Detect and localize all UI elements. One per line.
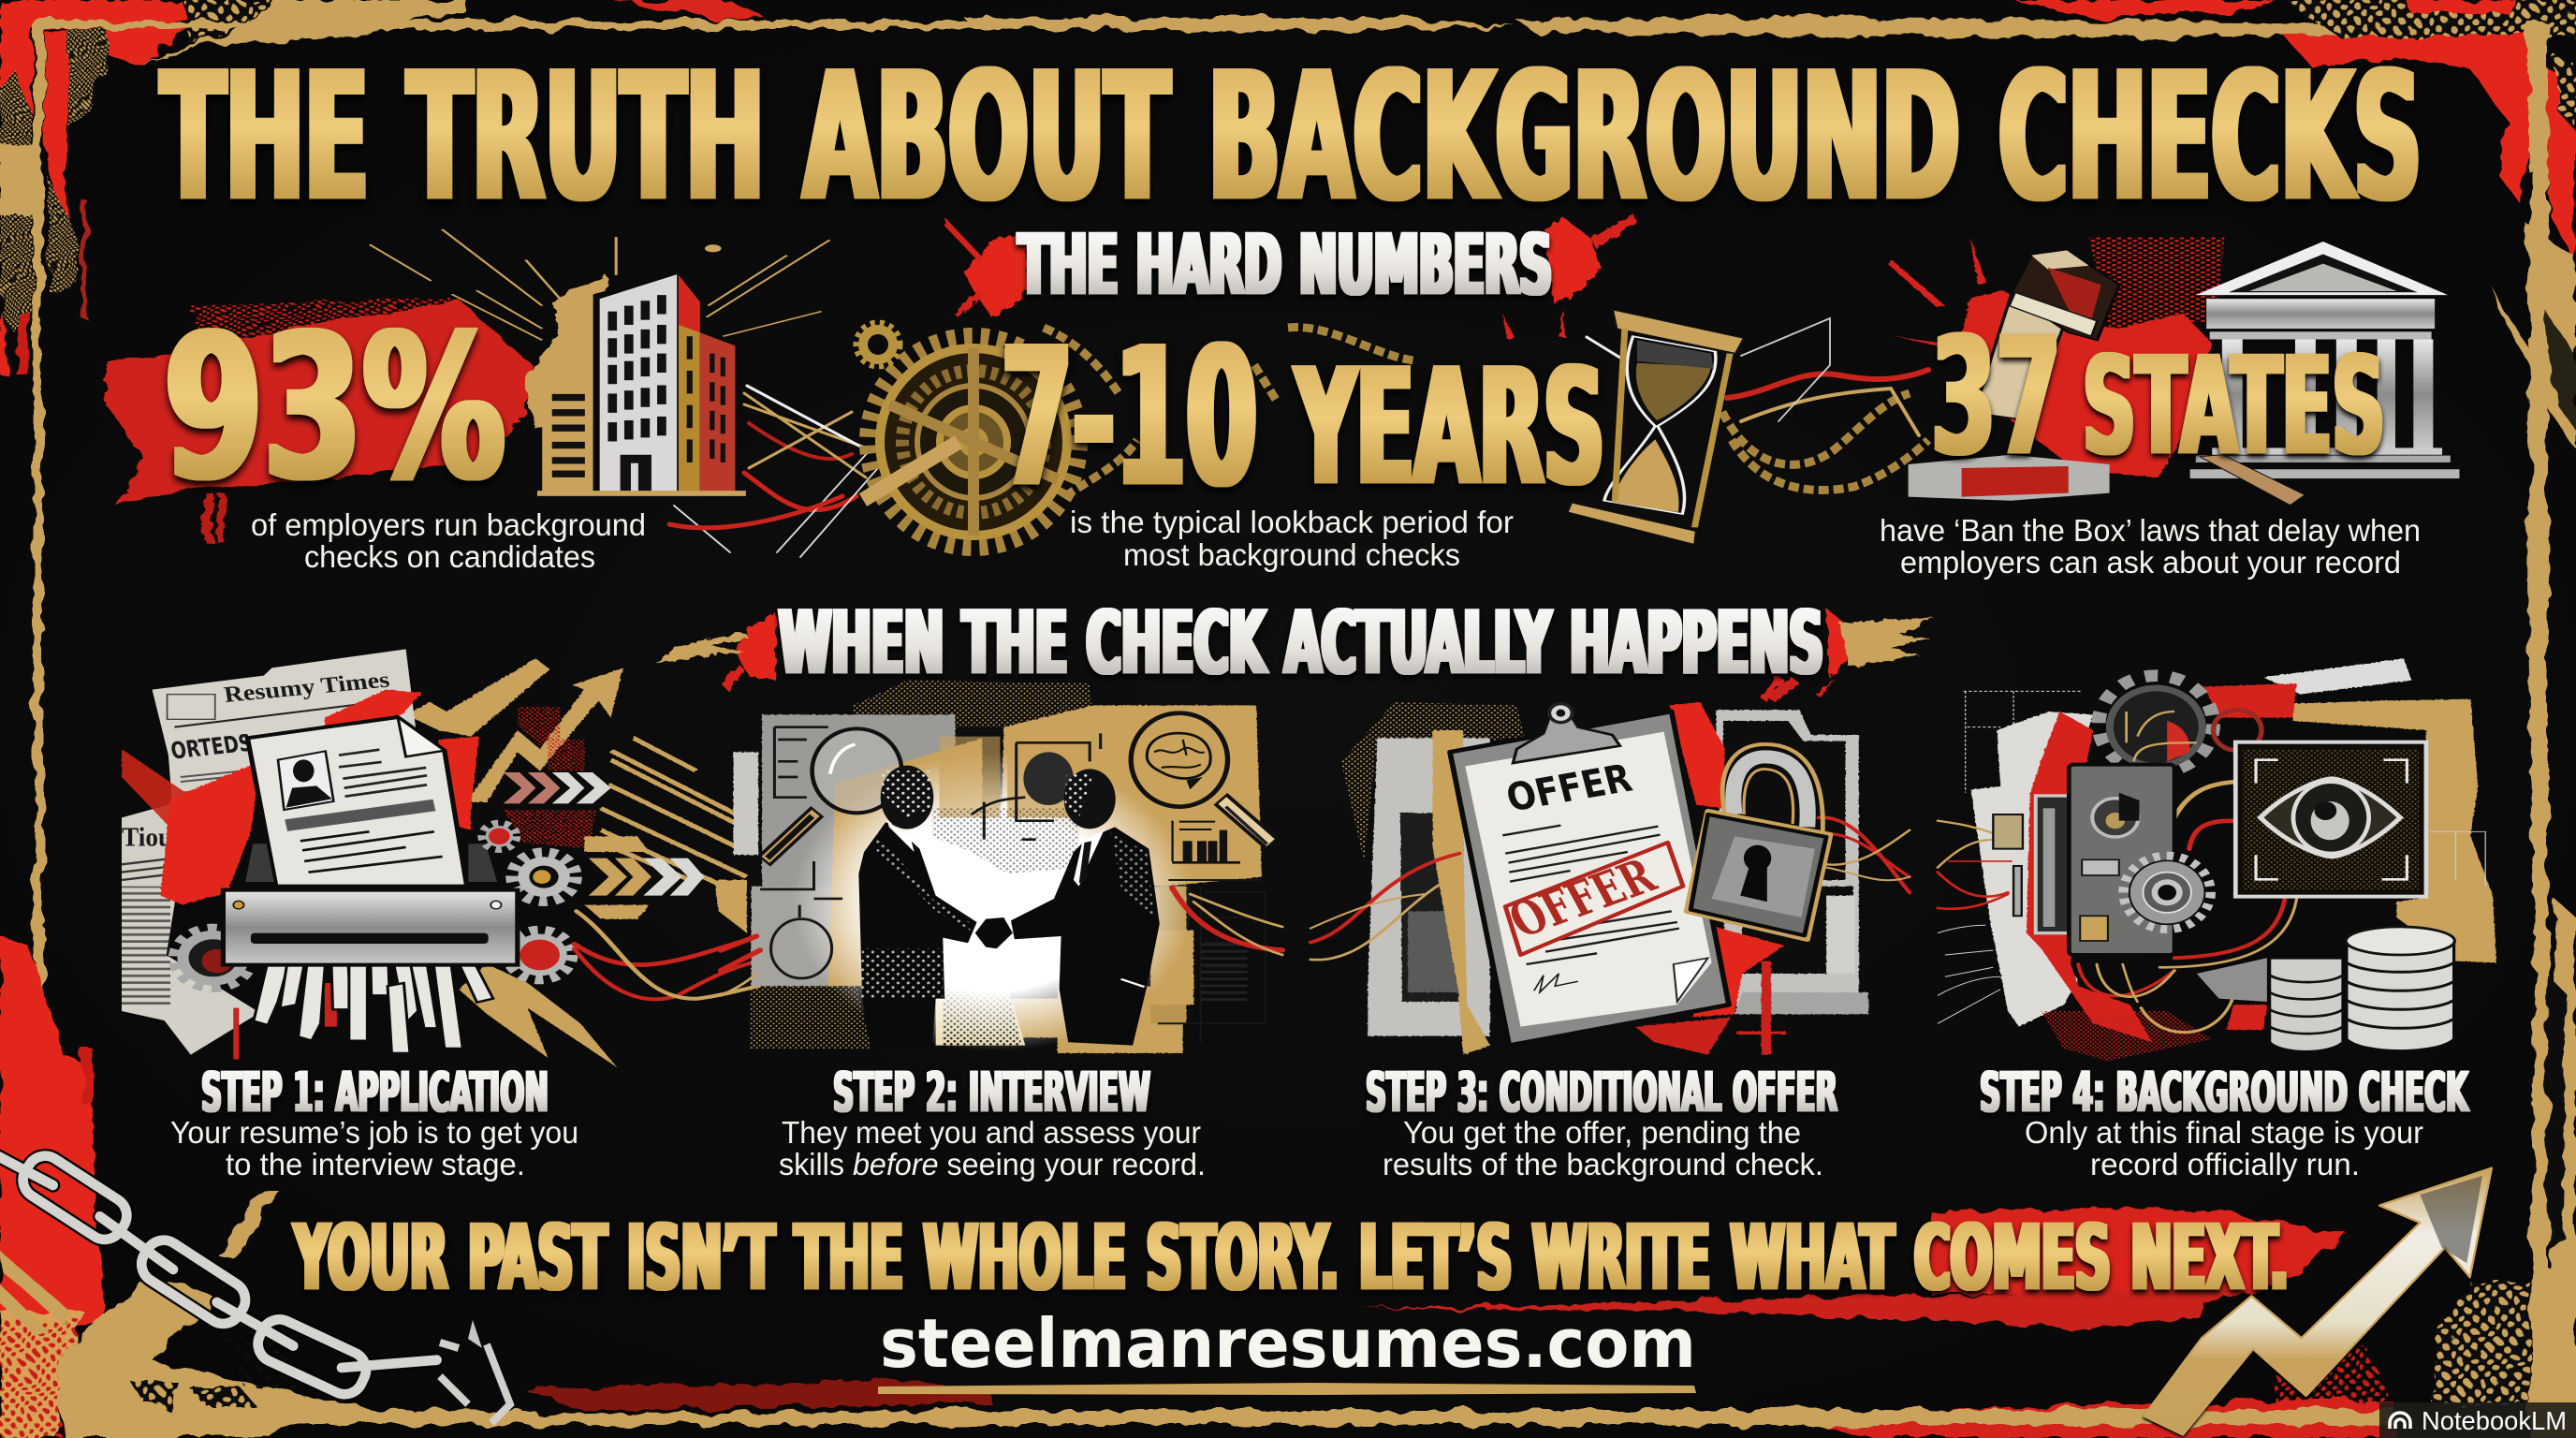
panel: step 1 application	[122, 649, 758, 1181]
heading splatter: when the check actually happens	[655, 609, 1934, 702]
magnifier right with brain	[1131, 713, 1272, 844]
url underline	[878, 1383, 1696, 1395]
stamp	[1505, 843, 1683, 955]
wires behind	[1310, 817, 1910, 960]
broken chain	[0, 1149, 510, 1423]
clipboard	[1450, 712, 1729, 1046]
database cylinders	[2270, 927, 2454, 1051]
step 1 description: Your resume’s job is to get you	[170, 1115, 578, 1150]
shredder body	[223, 890, 518, 965]
border: right side and bottom-right grunge	[524, 899, 2576, 1438]
eye panel	[2235, 742, 2426, 897]
newspaper: front sheet	[122, 803, 259, 1055]
side connector	[1993, 814, 2023, 849]
icon: red splatter behind gavel	[1888, 237, 2224, 477]
big gear	[2099, 676, 2261, 772]
caption: 37 states: have ‘Ban the Box’ laws that delay when	[1880, 513, 2421, 548]
clipboard title: OFFER	[1501, 756, 1636, 820]
caption line two: 37 states: employers can ask about your record	[1900, 545, 2401, 580]
icon: clockwork gears	[856, 323, 1079, 548]
caption: 93 percent: of employers run background	[251, 507, 646, 542]
panel: step 4 background check	[1938, 658, 2496, 1181]
icon: notebook logo	[2390, 1413, 2410, 1429]
icon: courthouse	[2190, 242, 2459, 478]
folder left	[1368, 710, 1868, 1036]
grey coins behind	[2197, 958, 2267, 1002]
resume sheet	[247, 717, 467, 887]
heading splatter: the hard numbers	[944, 213, 1636, 339]
border: left side and bottom-left grunge	[0, 936, 992, 1438]
icon: machine, eye and database	[1938, 658, 2496, 1061]
caption line two: 93 percent: checks on candidates	[304, 539, 595, 574]
small bar chart	[1171, 821, 1240, 864]
icon: hourglass	[1567, 310, 1744, 545]
stat: 93 percent of employers	[107, 229, 829, 574]
cog	[2125, 857, 2210, 929]
step 3 description line two: results of the background check.	[1383, 1147, 1823, 1181]
icon: handshake scene	[721, 681, 1282, 1053]
big number: 7-10: 7-10	[1002, 307, 1257, 530]
step 3 description: You get the offer, pending the	[1403, 1115, 1801, 1150]
icon: office building	[537, 271, 746, 496]
shredder strips	[233, 1008, 239, 1060]
icon: shredder with resume and newspapers: Tiou	[122, 823, 172, 852]
step 4 description line two: record officially run.	[2090, 1147, 2360, 1181]
icon: red and gold wires	[1587, 318, 1928, 435]
wires between the first two stats	[669, 374, 959, 557]
icon: clipboard, folders and padlock: OFFER	[1500, 849, 1665, 948]
wires	[1938, 782, 2297, 1033]
icon: clipboard, folders and padlock	[1310, 677, 1910, 1055]
control panel	[2069, 765, 2174, 955]
torn paper and color blocks	[1971, 658, 2496, 1042]
big number: 93 percent: 93%	[164, 290, 505, 525]
icon: shredder with resume and newspapers: ORTEDS	[168, 728, 254, 765]
step 2 description: They meet you and assess your	[782, 1115, 1201, 1150]
wires	[721, 888, 1282, 995]
icon: chain links	[1044, 328, 1928, 496]
stat: 37 states ban the box	[1880, 237, 2459, 580]
caption line two: 7-10 years: most background checks	[1123, 537, 1460, 572]
padlock	[1722, 744, 1822, 836]
call to action red brush	[1362, 1208, 2349, 1329]
big number: 37: 37	[1931, 302, 2061, 492]
newspaper: back sheet	[153, 649, 416, 887]
background documents	[760, 727, 1266, 1042]
panel: step 2 interview	[721, 681, 1282, 1181]
shredder side housing	[243, 843, 499, 883]
step 4 description: Only at this final stage is your	[2025, 1115, 2423, 1150]
panel: step 3 conditional offer	[1310, 677, 1910, 1181]
signature	[1534, 974, 1578, 992]
step 3 heading: STEP 3: CONDITIONAL OFFER	[1366, 1060, 1837, 1124]
watermark: NotebookLM	[2379, 1402, 2576, 1438]
icon: shredder with resume and newspapers: Resumy Times	[222, 668, 391, 708]
clip	[1513, 714, 1620, 763]
icon: red brush and gold burst behind 93 percent	[107, 229, 829, 543]
heading: the hard numbers: THE HARD NUMBERS	[1018, 216, 1552, 315]
step 2 heading: STEP 2: INTERVIEW	[833, 1060, 1150, 1124]
figure: right man	[1011, 769, 1160, 1046]
caption: 7-10 years: is the typical lookback period for	[1070, 505, 1514, 539]
website url: steelmanresumes.com	[880, 1304, 1696, 1383]
icon: rising arrow	[2144, 1168, 2492, 1435]
icon: gavel	[1909, 250, 2305, 506]
step 2 description line two: skills before seeing your record.	[779, 1147, 1206, 1181]
border: top-left corner grunge	[0, 0, 764, 374]
gold arrows and hatching	[406, 658, 747, 1067]
big word: years: YEARS	[1295, 333, 1604, 521]
figure: left man	[858, 766, 977, 1049]
handshake	[975, 917, 1013, 948]
red slash	[122, 690, 479, 905]
step 1 heading: STEP 1: APPLICATION	[201, 1060, 549, 1124]
stat: 7-10 years lookback	[856, 307, 1928, 572]
icon: shredder with resume and newspapers	[122, 649, 758, 1067]
red and gold brush	[1433, 677, 1799, 1055]
magnifier left	[764, 728, 901, 861]
chevrons	[504, 772, 560, 803]
gears	[176, 823, 576, 987]
wires	[575, 911, 758, 999]
step 1 description line two: to the interview stage.	[226, 1147, 525, 1181]
watermark: NotebookLM: NotebookLM	[2422, 1406, 2567, 1435]
